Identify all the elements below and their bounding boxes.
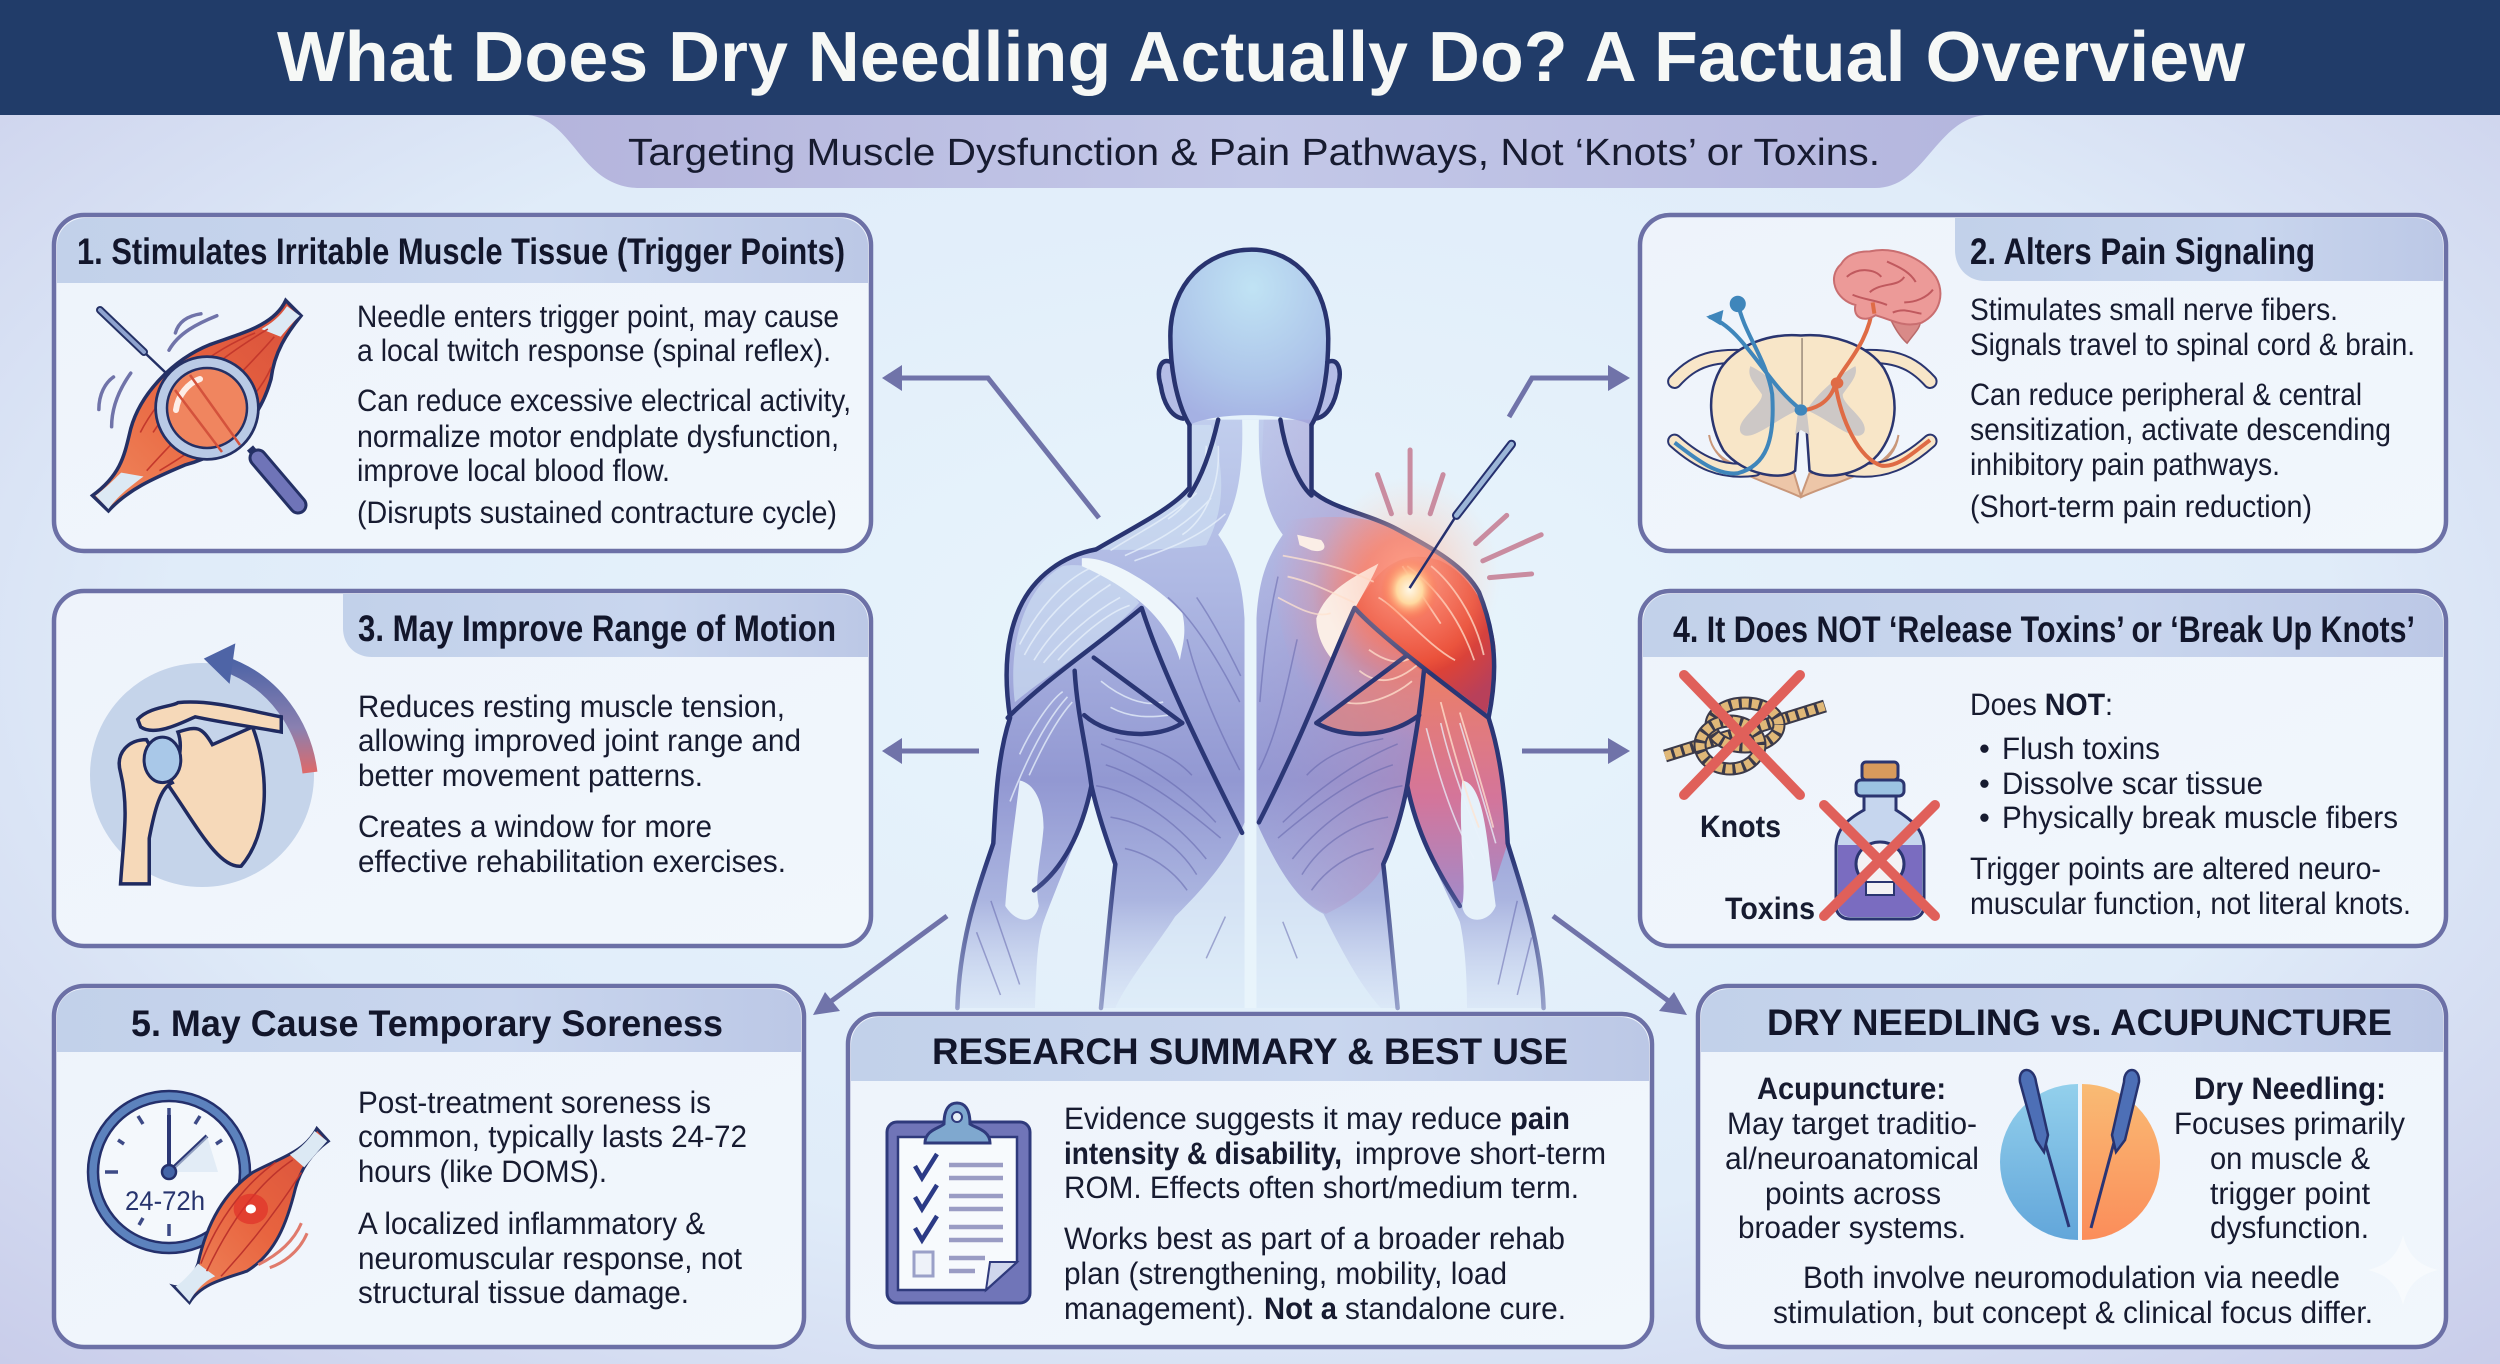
icon: clock and sore muscle [88, 1091, 328, 1303]
text 1: normalize motor endplate dysfunction, [357, 419, 839, 454]
heading 2: 2. Alters Pain Signaling [1970, 231, 2315, 272]
text 1: Can reduce excessive electrical activity, [357, 383, 851, 418]
text 4: • [1979, 800, 1990, 835]
text 5 [358, 1085, 747, 1310]
text 4 [1970, 687, 2411, 921]
icon: clipboard checklist [887, 1103, 1030, 1303]
text: acupuncture: broader systems. [1738, 1210, 1966, 1245]
text: research summary: management). [1064, 1291, 1254, 1326]
text: acupuncture: al/neuroanatomical [1725, 1141, 1979, 1176]
text: research summary: Evidence suggests it may reduce [1064, 1101, 1502, 1136]
text: dry needling: dysfunction. [2210, 1210, 2369, 1245]
text: research summary: Works best as part of a broader rehab [1064, 1221, 1565, 1256]
head [1170, 250, 1328, 425]
text: comparison conclusion [1773, 1260, 2373, 1330]
heading: research summary: RESEARCH SUMMARY & BEST USE [932, 1031, 1568, 1072]
title banner: What Does Dry Needling Actually Do? A Factual Overview [277, 18, 2246, 97]
text 4: Flush toxins [2002, 731, 2160, 766]
icon: crossed out knot [1665, 675, 1825, 795]
label: toxins: Toxins [1725, 891, 1815, 926]
central figure: back muscles with needle [955, 250, 1544, 1008]
text 4: Trigger points are altered neuro- [1970, 851, 2381, 886]
lower back pale [1115, 822, 1381, 1008]
arrow: panel 5 [813, 916, 947, 1015]
title banner [0, 0, 2500, 115]
text 3: allowing improved joint range and [358, 723, 801, 758]
text 3 [358, 689, 801, 879]
text: research summary: Not a [1264, 1291, 1338, 1326]
text 1: Needle enters trigger point, may cause [357, 299, 839, 334]
arrow: panel 1 [882, 365, 1099, 518]
torso and arms silhouette [955, 420, 1544, 1008]
text: dry needling: trigger point [2210, 1176, 2370, 1211]
right side pink tint [1256, 420, 1489, 914]
text: comparison conclusion: Both involve neuromodulation via needle [1803, 1260, 2340, 1295]
text 3: Reduces resting muscle tension, [358, 689, 785, 724]
text 3: better movement patterns. [358, 758, 703, 793]
text 4: muscular function, not literal knots. [1970, 886, 2411, 921]
panel 1: stimulates irritable muscle tissue [54, 215, 871, 551]
text 4: Physically break muscle fibers [2002, 800, 2398, 835]
text 4: • [1979, 766, 1990, 801]
text: research summary: ROM. Effects often short/medium term. [1064, 1170, 1579, 1205]
subtitle banner: Targeting Muscle Dysfunction & Pain Pathways, Not ‘Knots’ or Toxins. [628, 132, 1880, 174]
text 1: a local twitch response (spinal reflex). [357, 333, 831, 368]
needle [1410, 514, 1457, 588]
text 5: Post-treatment soreness is [358, 1085, 711, 1120]
icon: sparkle watermark [2368, 1235, 2438, 1305]
text 1: (Disrupts sustained contracture cycle) [357, 495, 837, 530]
text 2: Can reduce peripheral & central [1970, 377, 2362, 412]
ears [1159, 361, 1340, 419]
left scapular white [1082, 558, 1184, 660]
text 1 [357, 299, 851, 530]
panel 5: temporary soreness [54, 986, 804, 1347]
text: dry needling: Focuses primarily [2174, 1106, 2405, 1141]
spine [1218, 420, 1283, 1008]
text: dry needling: on muscle & [2210, 1141, 2370, 1176]
text 4: Does NOT: [1970, 687, 2113, 722]
heading 1: 1. Stimulates Irritable Muscle Tissue (Trigger Points) [77, 231, 845, 272]
text 2: inhibitory pain pathways. [1970, 447, 2280, 482]
text 2: (Short-term pain reduction) [1970, 489, 2312, 524]
arrow: comparison panel [1553, 916, 1687, 1015]
text 5: A localized inflammatory & [358, 1206, 705, 1241]
right glow [1268, 517, 1492, 786]
panel 3: range of motion [54, 591, 871, 946]
icon: crossed out toxin bottle [1824, 762, 1935, 919]
inner arm pale patches [1005, 781, 1496, 920]
text: acupuncture [1725, 1071, 1979, 1245]
icon: two needles over split circle [2000, 1070, 2160, 1240]
muscle fibres [977, 446, 1532, 995]
text: research summary: plan (strengthening, mobility, load [1064, 1256, 1507, 1291]
text 4: • [1979, 731, 1990, 766]
icon: spinal cord and brain [1675, 250, 1940, 497]
text 1: improve local blood flow. [357, 453, 670, 488]
subtitle banner [528, 115, 1985, 188]
text: research summary [1064, 1101, 1606, 1326]
text 5: neuromuscular response, not [358, 1241, 742, 1276]
text: comparison conclusion: stimulation, but concept & clinical focus differ. [1773, 1295, 2373, 1330]
panel: research summary and best use [848, 1014, 1652, 1347]
text 2: Signals travel to spinal cord & brain. [1970, 327, 2415, 362]
text 5: hours (like DOMS). [358, 1154, 607, 1189]
arrow: panel 2 [1509, 365, 1630, 417]
infraspinatus tint [1321, 658, 1424, 734]
text 5: structural tissue damage. [358, 1275, 689, 1310]
text 4: Dissolve scar tissue [2002, 766, 2263, 801]
icon: muscle under magnifier [92, 300, 301, 511]
panel: dry needling vs acupuncture [1698, 986, 2446, 1347]
deltoid red [1355, 557, 1496, 715]
right scapular white [1297, 535, 1378, 660]
text: research summary: improve short-term [1355, 1136, 1606, 1171]
text 3: effective rehabilitation exercises. [358, 844, 786, 879]
panel 4: does not release toxins [1640, 591, 2446, 946]
text 5: common, typically lasts 24-72 [358, 1119, 747, 1154]
text 2: Stimulates small nerve fibers. [1970, 292, 2338, 327]
text: research summary: pain [1510, 1101, 1570, 1136]
text: research summary: standalone cure. [1345, 1291, 1566, 1326]
text: acupuncture: points across [1765, 1176, 1941, 1211]
arrow: panel 3 [882, 738, 979, 764]
arrow: panel 4 [1522, 738, 1630, 764]
text: research summary: intensity & disability, [1064, 1136, 1342, 1171]
text 2 [1970, 292, 2415, 524]
text: dry needling [2174, 1071, 2405, 1245]
heading 3: 3. May Improve Range of Motion [358, 608, 836, 649]
icon: shoulder joint [90, 643, 314, 887]
text 3: Creates a window for more [358, 809, 712, 844]
pain rays [1378, 450, 1541, 578]
label: knots: Knots [1700, 809, 1781, 844]
text 2: sensitization, activate descending [1970, 412, 2391, 447]
icon: clock and sore muscle: 24-72h [125, 1186, 205, 1216]
pain burst [1319, 477, 1501, 676]
upper left highlight [1013, 425, 1221, 702]
text: acupuncture: Acupuncture: [1757, 1071, 1946, 1106]
heading: comparison: DRY NEEDLING vs. ACUPUNCTURE [1767, 1002, 2392, 1043]
dark outlines [957, 250, 1544, 1008]
text: dry needling: Dry Needling: [2194, 1071, 2386, 1106]
text: acupuncture: May target traditio- [1727, 1106, 1977, 1141]
heading 5: 5. May Cause Temporary Soreness [131, 1003, 723, 1044]
panel 2: alters pain signaling [1640, 215, 2446, 551]
triceps red [1407, 671, 1508, 906]
